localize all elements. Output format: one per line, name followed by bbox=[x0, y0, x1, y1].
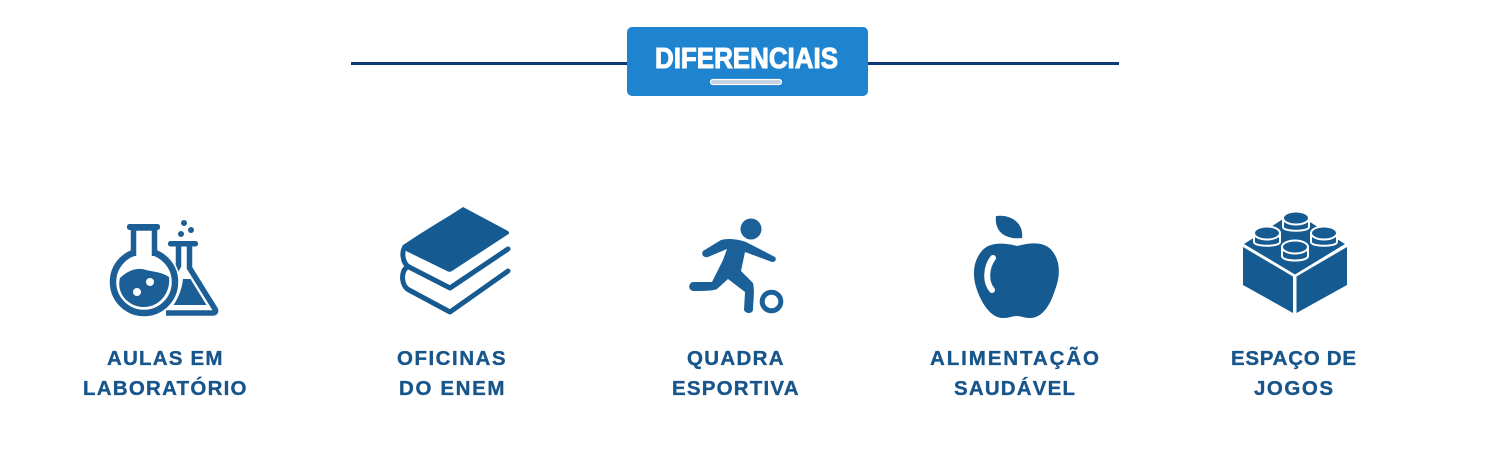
header badge bbox=[627, 27, 868, 96]
label: ALIMENTAÇÃO bbox=[930, 347, 1099, 370]
label: QUADRA bbox=[687, 347, 784, 370]
item: aulas em laboratório bbox=[83, 220, 247, 400]
item: quadra esportiva bbox=[672, 218, 799, 400]
item: alimentação saudável bbox=[930, 216, 1099, 400]
label: SAUDÁVEL bbox=[954, 377, 1075, 400]
heading underline bbox=[710, 80, 782, 84]
item: espaço de jogos bbox=[1231, 212, 1356, 400]
icon: flasks bbox=[108, 220, 216, 318]
label: JOGOS bbox=[1254, 377, 1333, 400]
label: ESPORTIVA bbox=[672, 377, 799, 400]
label: LABORATÓRIO bbox=[83, 376, 247, 400]
label: OFICINAS bbox=[397, 347, 506, 370]
label: DO ENEM bbox=[399, 377, 504, 400]
icon: apple bbox=[974, 216, 1059, 318]
icon: soccer player bbox=[689, 218, 781, 313]
item: oficinas do enem bbox=[397, 207, 509, 400]
label: AULAS EM bbox=[107, 347, 222, 370]
icon: books bbox=[402, 207, 509, 312]
icon: lego brick bbox=[1243, 212, 1347, 313]
heading: diferenciais: DIFERENCIAIS bbox=[655, 43, 838, 75]
label: ESPAÇO DE bbox=[1231, 347, 1356, 370]
